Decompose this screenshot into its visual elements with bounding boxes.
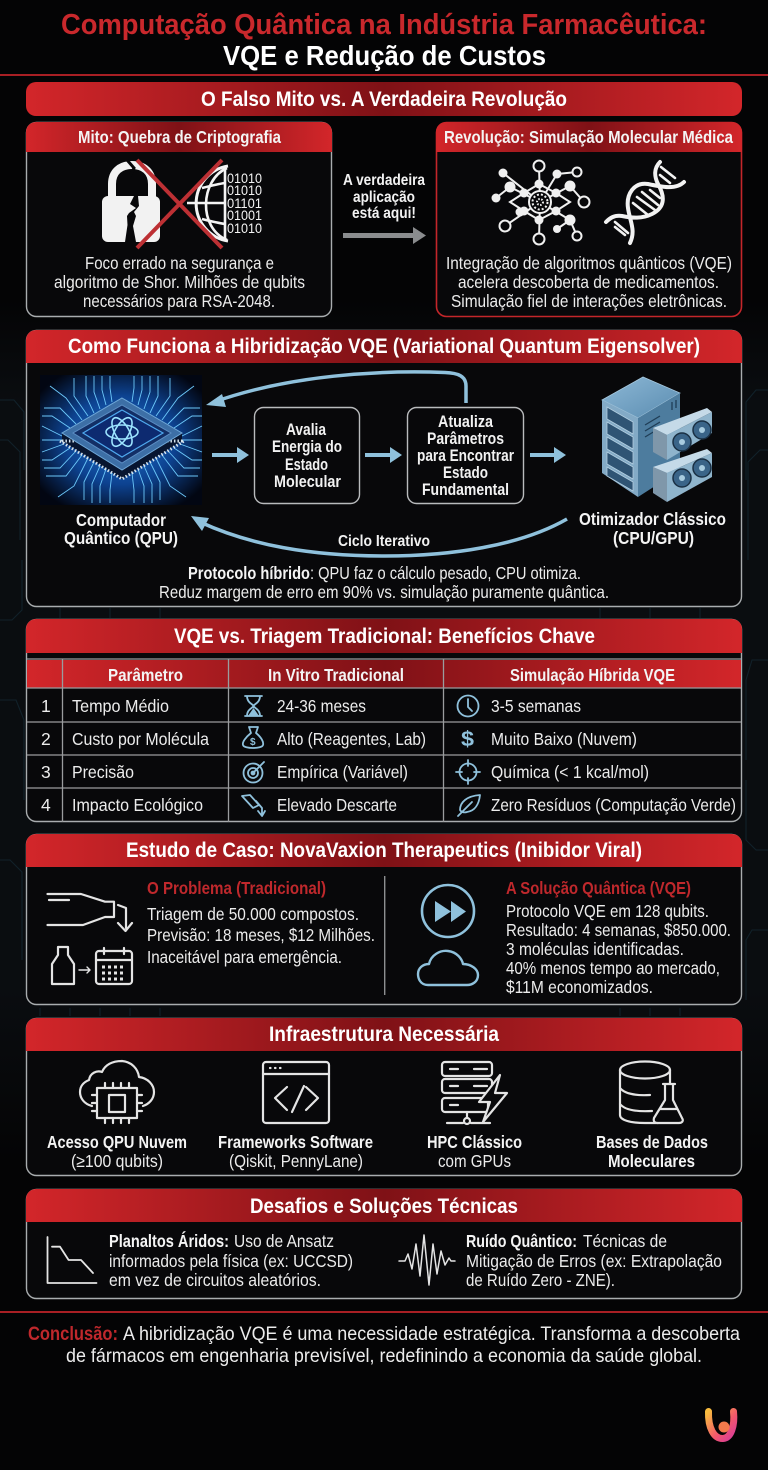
label: frameworks: (Qiskit, PennyLane) <box>229 1151 363 1171</box>
arrow: iterative cycle <box>191 516 567 556</box>
box: avalia energia: Molecular <box>274 473 341 491</box>
row 2: 2 <box>41 729 51 749</box>
panel: challenges <box>26 1189 742 1298</box>
label: cloud QPU <box>47 1132 187 1171</box>
icon: classical server <box>602 377 712 502</box>
row 1: 3-5 semanas <box>491 696 581 716</box>
icon: globe with binary: 01001 <box>227 208 262 223</box>
icon: noise wave <box>399 1235 455 1285</box>
table header row: Simulação Híbrida VQE <box>510 665 675 685</box>
label: optimizer: Otimizador Clássico <box>579 509 726 529</box>
text: problem: Inaceitável para emergência. <box>147 947 342 967</box>
title <box>61 9 707 71</box>
panel: comparison table <box>26 619 742 822</box>
icon: leaf <box>458 795 480 816</box>
box: avalia energia: Estado <box>285 456 328 474</box>
text: hybrid protocol: Protocolo híbrido <box>188 563 310 583</box>
text: problem <box>147 878 375 967</box>
text: quantum noise: Ruído Quântico: <box>466 1231 577 1251</box>
text: solution: A Solução Quântica (VQE) <box>506 878 691 898</box>
label: QPU: Quântico (QPU) <box>64 528 178 548</box>
label: frameworks <box>218 1132 373 1171</box>
icon: money bag: $ <box>250 737 256 748</box>
row 4: Impacto Ecológico <box>72 795 203 815</box>
row 3: Precisão <box>72 762 134 782</box>
row 3: 3 <box>41 762 51 782</box>
text: quantum noise: Técnicas de <box>583 1231 667 1251</box>
table header row <box>27 660 741 688</box>
icon: globe with binary: 01010 <box>227 221 262 236</box>
text: problem: O Problema (Tradicional) <box>147 878 326 898</box>
row 2 <box>41 727 637 751</box>
arrow: QPU to energy <box>212 447 249 463</box>
text: mito: algoritmo de Shor. Milhões de qubits <box>54 272 305 292</box>
icon: fast forward <box>422 885 474 937</box>
icon: globe with binary: 01101 <box>227 196 262 211</box>
text: barren plateaus: informados pela física (ex: UCCSD) <box>109 1251 353 1271</box>
icon: money bag <box>243 727 263 748</box>
conclusion <box>28 1323 740 1367</box>
icon: discard <box>242 795 265 816</box>
row 3: Empírica (Variável) <box>277 762 408 782</box>
text: solution: 3 moléculas identificadas. <box>506 939 684 959</box>
row 4: Elevado Descarte <box>277 795 397 815</box>
text: revolução: Integração de algoritmos quânticos (VQE) <box>446 253 732 273</box>
conclusion: de fármacos em engenharia previsível, redefinindo a economia da saúde global. <box>66 1345 702 1367</box>
text: barren plateaus <box>109 1230 353 1290</box>
text: barren plateaus: Planaltos Áridos: <box>109 1230 229 1251</box>
text: revolução <box>446 253 732 311</box>
icon: target <box>244 762 264 782</box>
label: HPC: HPC Clássico <box>427 1132 522 1152</box>
text: revolução: acelera descoberta de medicamentos. <box>458 272 719 292</box>
icon: broken lock <box>102 160 160 242</box>
table header row: In Vitro Tradicional <box>268 665 404 685</box>
row 1: Tempo Médio <box>72 696 169 716</box>
box: atualiza parâmetros: Fundamental <box>422 481 509 499</box>
heading: case study: Estudo de Caso: NovaVaxion Therapeutics (Inibidor Viral) <box>126 838 642 862</box>
label: databases <box>596 1132 708 1171</box>
row 4: 4 <box>41 795 51 815</box>
text: quantum noise: Mitigação de Erros (ex: Extrapolação <box>466 1251 722 1271</box>
arrow: params to optimizer <box>530 447 566 463</box>
arrow: verdadeira aplicação: A verdadeira <box>343 172 425 189</box>
section header: mito vs revolução: O Falso Mito vs. A Verdadeira Revolução <box>201 87 567 111</box>
icon: code window <box>263 1062 329 1123</box>
box: avalia energia <box>254 408 360 504</box>
icon: quantum chip <box>40 375 202 505</box>
icon: bottle to calendar <box>52 947 132 984</box>
icon: cloud <box>418 951 478 985</box>
icon: clock <box>458 696 478 716</box>
label: QPU <box>64 510 178 548</box>
icon: red cross <box>137 160 222 248</box>
label: cloud QPU: (≥100 qubits) <box>71 1151 163 1171</box>
row 2: Custo por Molécula <box>72 729 209 749</box>
icon: barren plateau chart <box>48 1237 96 1283</box>
arrow: verdadeira aplicação: aplicação <box>353 189 415 206</box>
text: problem: Triagem de 50.000 compostos. <box>147 904 359 924</box>
icon: hourglass <box>245 696 262 716</box>
panel: hibridização VQE <box>26 330 742 606</box>
text: quantum noise: de Ruído Zero - ZNE). <box>466 1270 615 1290</box>
section header: mito vs revolução <box>26 82 742 116</box>
icon: dollar: $ <box>461 728 474 751</box>
label: QPU: Computador <box>76 510 166 530</box>
arrow: verdadeira aplicação <box>343 172 426 244</box>
box: atualiza parâmetros: Parâmetros <box>427 430 504 448</box>
text: mito: Foco errado na segurança e <box>85 253 274 273</box>
panel: case study <box>26 834 742 1004</box>
box: avalia energia: Energia do <box>272 438 342 456</box>
row 3 <box>41 760 649 784</box>
arrow: energy to params <box>365 447 402 463</box>
heading: table: VQE vs. Triagem Tradicional: Benefícios Chave <box>174 624 595 648</box>
text: solution: Resultado: 4 semanas, $850.000. <box>506 920 731 940</box>
box: atualiza parâmetros: para Encontrar <box>417 447 514 465</box>
title: VQE e Redução de Custos <box>223 40 546 71</box>
box: atualiza parâmetros: Atualiza <box>438 413 494 431</box>
arrow: top feedback <box>206 372 466 407</box>
icon: globe with binary: 01010 <box>227 171 262 186</box>
box: avalia energia: Avalia <box>286 421 327 439</box>
text: problem: Previsão: 18 meses, $12 Milhões. <box>147 925 375 945</box>
label: optimizer <box>579 509 726 548</box>
text: hybrid protocol: Reduz margem de erro em 90% vs. simulação puramente quântica. <box>159 582 609 602</box>
label: frameworks: Frameworks Software <box>218 1132 373 1152</box>
icon: cloud chip <box>80 1061 154 1123</box>
icon: pouring bottle <box>48 894 132 931</box>
text: solution <box>506 878 731 997</box>
icon: globe with binary: 01010 <box>227 183 262 198</box>
box: atualiza parâmetros <box>408 408 524 504</box>
text: quantum noise <box>466 1231 722 1290</box>
row 2: Muito Baixo (Nuvem) <box>491 729 637 749</box>
icon: crosshair <box>456 760 480 784</box>
row 1: 1 <box>41 696 51 716</box>
arrow: verdadeira aplicação: está aqui! <box>352 205 416 222</box>
row 3: Química (< 1 kcal/mol) <box>491 762 649 782</box>
icon: logo <box>708 1412 734 1439</box>
panel: revolução <box>436 122 742 316</box>
text: barren plateaus: em vez de circuitos aleatórios. <box>109 1270 321 1290</box>
label: databases: Bases de Dados <box>596 1132 708 1152</box>
box: atualiza parâmetros: Estado <box>443 464 488 482</box>
row 1: 24-36 meses <box>277 696 366 716</box>
icon: database flask <box>620 1062 683 1123</box>
text: hybrid protocol: : QPU faz o cálculo pesado, CPU otimiza. <box>310 563 581 583</box>
icon: globe with binary <box>187 166 262 241</box>
heading: mito: Mito: Quebra de Criptografia <box>78 127 281 147</box>
icon: HPC server <box>442 1062 507 1124</box>
text: mito: necessários para RSA-2048. <box>83 291 275 311</box>
row 4 <box>41 795 736 816</box>
panel: infrastructure <box>26 1018 742 1176</box>
label: databases: Moleculares <box>608 1151 695 1171</box>
text: revolução: Simulação fiel de interações eletrônicas. <box>451 291 727 311</box>
icon: dna <box>606 162 684 243</box>
text: solution: 40% menos tempo ao mercado, <box>506 958 720 978</box>
row 2: Alto (Reagentes, Lab) <box>277 729 426 749</box>
title: Computação Quântica na Indústria Farmacêutica: <box>61 9 707 41</box>
label: optimizer: (CPU/GPU) <box>613 528 694 548</box>
panel: mito <box>26 122 332 316</box>
label: HPC: com GPUs <box>438 1151 511 1171</box>
heading: infrastructure: Infraestrutura Necessária <box>269 1022 500 1046</box>
row 4: Zero Resíduos (Computação Verde) <box>491 795 736 815</box>
label: cloud QPU: Acesso QPU Nuvem <box>47 1132 187 1152</box>
label: HPC <box>427 1132 522 1171</box>
text: hybrid protocol <box>159 563 609 602</box>
table header row: Parâmetro <box>108 665 183 685</box>
heading: challenges: Desafios e Soluções Técnicas <box>250 1194 518 1218</box>
label: iterative cycle: Ciclo Iterativo <box>338 533 430 550</box>
row 1 <box>41 696 581 716</box>
conclusion: Conclusão: <box>28 1323 118 1345</box>
text: solution: Protocolo VQE em 128 qubits. <box>506 901 709 921</box>
icon: molecule <box>492 160 590 244</box>
text: mito <box>54 253 305 311</box>
text: barren plateaus: Uso de Ansatz <box>234 1231 334 1251</box>
text: solution: $11M economizados. <box>506 977 653 997</box>
